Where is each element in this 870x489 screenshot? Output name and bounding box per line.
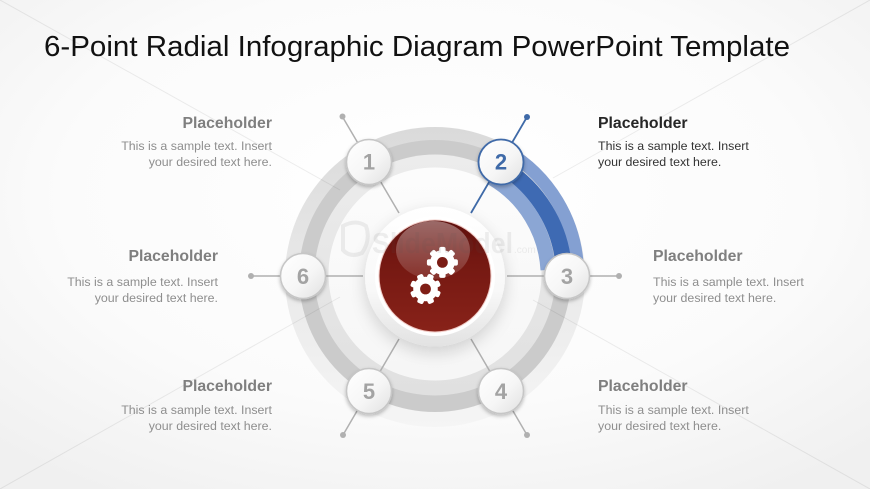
text block 2	[598, 115, 749, 169]
text block 3	[653, 248, 804, 305]
text block 3: This is a sample text. Insert	[653, 275, 804, 289]
watermark: SlideModel	[372, 228, 513, 260]
node 1: 1	[363, 150, 375, 174]
text block 3: Placeholder	[653, 248, 743, 265]
text block 3: your desired text here.	[653, 291, 776, 305]
text block 4: This is a sample text. Insert	[598, 403, 749, 417]
text block 1	[121, 115, 273, 169]
gloss	[396, 221, 470, 279]
title: 6-Point Radial Infographic Diagram PowerPoint Template	[44, 31, 790, 63]
text block 5: This is a sample text. Insert	[121, 403, 273, 417]
text block 6: your desired text here.	[95, 291, 218, 305]
text block 6: This is a sample text. Insert	[67, 275, 219, 289]
gray ring	[285, 127, 585, 427]
node 3	[544, 254, 590, 298]
node 1	[346, 140, 392, 184]
text block 2: your desired text here.	[598, 155, 721, 169]
node 5: 5	[363, 379, 375, 404]
node 2: 2	[495, 150, 507, 174]
node 6: 6	[297, 264, 309, 289]
text block 2: This is a sample text. Insert	[598, 139, 749, 153]
text block 1: This is a sample text. Insert	[121, 139, 273, 153]
text block 6: Placeholder	[128, 248, 218, 265]
node 3: 3	[561, 264, 573, 289]
text block 4	[598, 378, 749, 433]
text block 5	[121, 378, 273, 433]
text block 6	[67, 248, 219, 305]
node 4: 4	[495, 379, 508, 404]
connector lines	[248, 114, 622, 438]
icon: gears	[410, 247, 458, 305]
blue ring segment	[492, 151, 578, 270]
center hub	[365, 206, 505, 346]
text block 4: your desired text here.	[598, 419, 721, 433]
watermark	[343, 222, 536, 260]
gear lower	[410, 273, 441, 305]
node 6	[280, 254, 326, 298]
text block 5: your desired text here.	[149, 419, 272, 433]
text block 2: Placeholder	[598, 115, 688, 132]
text block 1: your desired text here.	[149, 155, 272, 169]
text block 4: Placeholder	[598, 378, 688, 395]
text block 5: Placeholder	[182, 378, 272, 395]
blue connector	[471, 114, 530, 213]
node 2	[478, 140, 524, 184]
node 5	[346, 368, 392, 414]
node 4	[478, 368, 524, 414]
text block 1: Placeholder	[182, 115, 272, 132]
watermark: .com	[514, 245, 536, 256]
gear upper	[427, 247, 458, 278]
